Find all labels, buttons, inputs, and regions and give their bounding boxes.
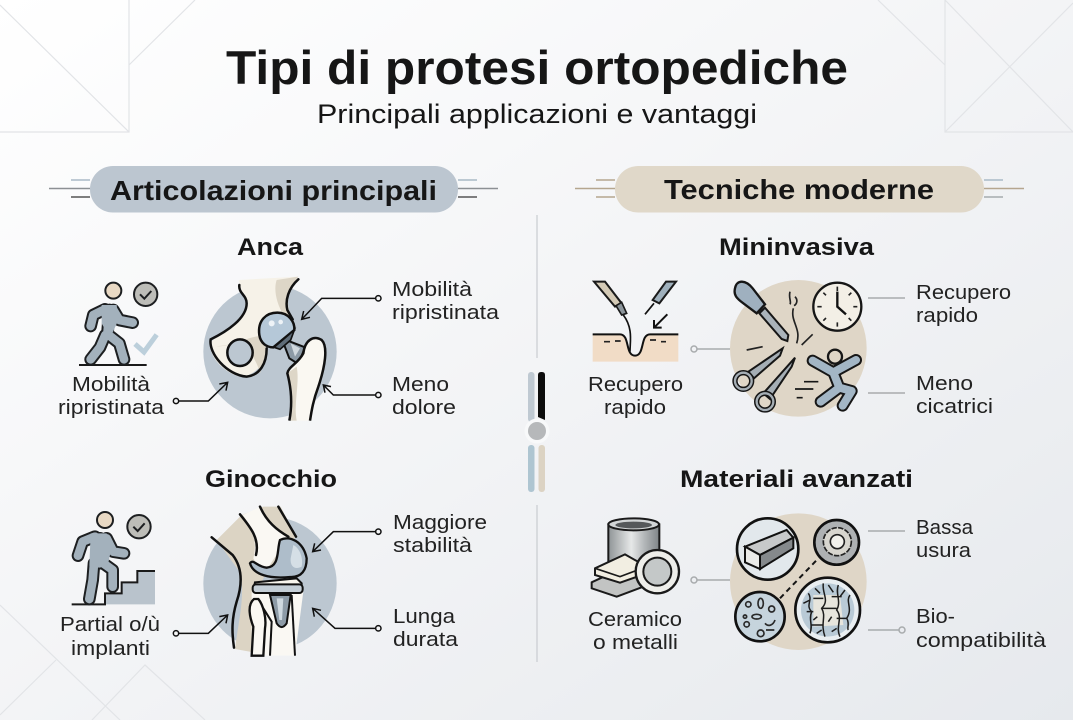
icon: person climbing stairs xyxy=(72,512,155,604)
labels: hip right: Meno xyxy=(392,374,449,396)
labels: hip right: ripristinata xyxy=(392,302,500,324)
label: Ceramico o metalli xyxy=(588,609,682,654)
labels: Materiali right: usura xyxy=(916,540,972,562)
labels: hip right: Mobilità xyxy=(392,279,473,301)
label: Partial o/ù implanti: Partial o/ù xyxy=(60,614,160,636)
labels: knee right: stabilità xyxy=(393,535,473,557)
labels: knee right xyxy=(393,512,487,651)
labels: Mininvasiva right: Meno xyxy=(916,373,973,395)
labels: knee right: Lunga xyxy=(393,606,456,628)
labels: hip right xyxy=(392,279,500,419)
panel heading: Tecniche moderne xyxy=(575,166,1024,212)
subtitle: Principali applicazioni e vantaggi xyxy=(317,99,757,129)
icon: walking person xyxy=(79,283,157,365)
leader arrows: knee xyxy=(173,529,381,636)
labels: Mininvasiva right: cicatrici xyxy=(916,396,993,418)
labels: Materiali right: Bio- xyxy=(916,606,955,628)
heading: Materiali avanzati: Materiali avanzati xyxy=(680,466,913,493)
labels: knee right: Maggiore xyxy=(393,512,487,534)
labels: Mininvasiva right xyxy=(916,282,1011,418)
label: Mobilità ripristinata (left) xyxy=(58,374,165,419)
heading: Mininvasiva: Mininvasiva xyxy=(719,234,875,261)
labels: Materiali right: compatibilità xyxy=(916,630,1047,652)
label: Ceramico o metalli: o metalli xyxy=(593,632,678,654)
label: Recupero rapido (left): Recupero xyxy=(588,374,683,396)
title: Tipi di protesi ortopediche xyxy=(226,41,848,94)
labels: knee right: durata xyxy=(393,629,459,651)
label: Mobilità ripristinata (left): ripristinata xyxy=(58,397,165,419)
labels: Materiali right xyxy=(916,517,1047,652)
leader lines: minimally invasive xyxy=(691,298,905,393)
label: Mobilità ripristinata (left): Mobilità xyxy=(72,374,151,396)
label: Recupero rapido (left) xyxy=(588,374,683,419)
heading: Anca: Anca xyxy=(237,234,304,261)
labels: Mininvasiva right: rapido xyxy=(916,305,978,327)
label: Ceramico o metalli: Ceramico xyxy=(588,609,682,631)
illustration: knee joint xyxy=(203,507,337,656)
panel heading: Articolazioni principali: Articolazioni principali xyxy=(110,175,437,206)
icon: ceramic and metal parts xyxy=(592,518,679,597)
central divider xyxy=(524,215,550,662)
panel heading: Articolazioni principali xyxy=(49,166,498,212)
illustration: advanced materials xyxy=(730,513,867,650)
leader arrows: hip xyxy=(173,296,381,404)
labels: Materiali right: Bassa xyxy=(916,517,974,539)
panel heading: Tecniche moderne: Tecniche moderne xyxy=(664,174,934,205)
leader lines: materials xyxy=(691,531,905,633)
icon: incision with instruments xyxy=(593,282,678,362)
illustration: hip joint xyxy=(203,277,337,421)
illustration: minimally invasive tools xyxy=(730,280,867,417)
label: Partial o/ù implanti xyxy=(60,614,160,660)
labels: Mininvasiva right: Recupero xyxy=(916,282,1011,304)
label: Partial o/ù implanti: implanti xyxy=(71,638,150,660)
label: Recupero rapido (left): rapido xyxy=(604,397,666,419)
heading: Ginocchio: Ginocchio xyxy=(205,466,337,493)
labels: hip right: dolore xyxy=(392,397,456,419)
